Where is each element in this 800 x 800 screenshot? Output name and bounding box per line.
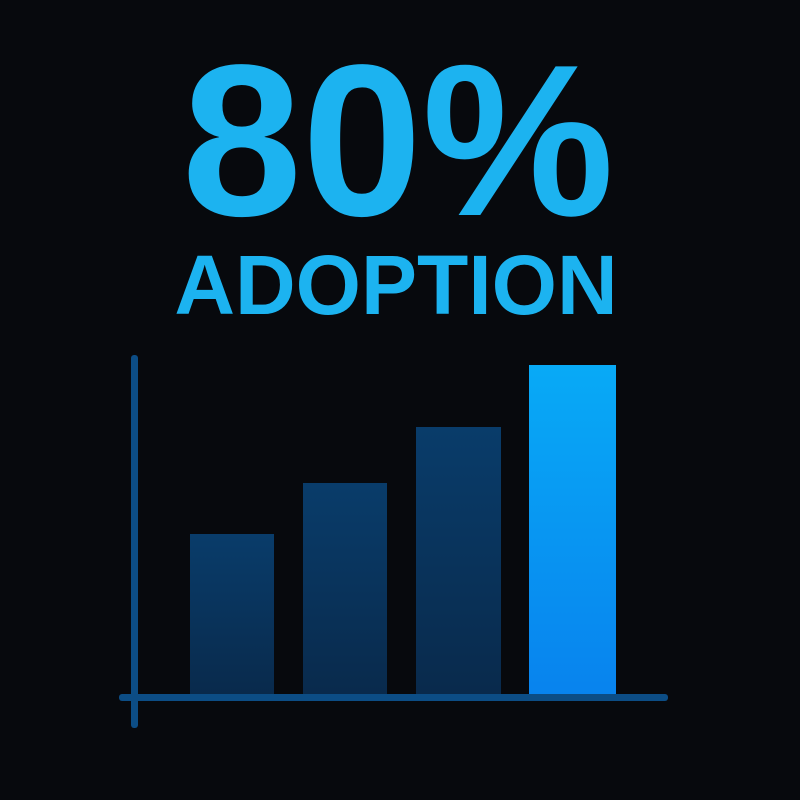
subtitle: ADOPTION: ADOPTION <box>174 238 618 332</box>
bar 4 highlighted <box>529 365 616 695</box>
bar 1 <box>190 534 274 695</box>
bar 2 <box>303 483 387 695</box>
x axis <box>119 694 668 701</box>
bar 3 <box>416 427 501 695</box>
title: 80%: 80% <box>182 19 614 261</box>
y axis <box>131 355 138 728</box>
